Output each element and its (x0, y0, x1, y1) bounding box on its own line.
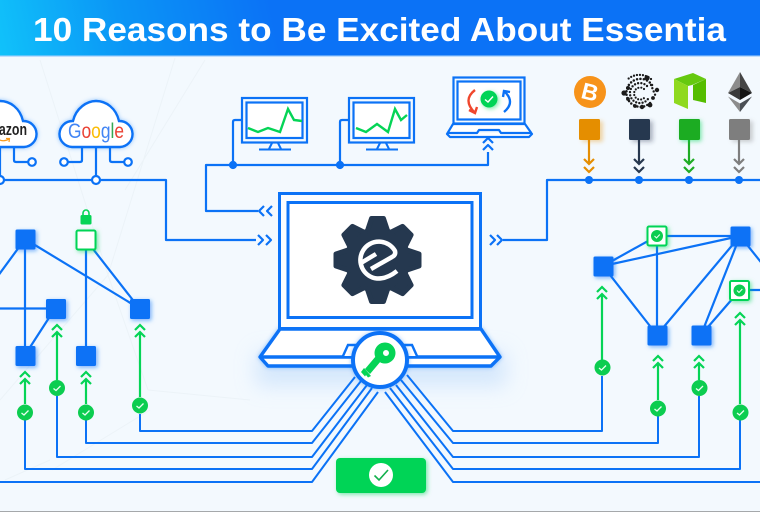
crypto feed: grey square and arrow (729, 119, 750, 184)
key badge (353, 333, 407, 387)
verified node top (648, 226, 666, 246)
blue nodes (594, 226, 750, 346)
left network graph (0, 210, 150, 366)
routing lines from key to nodes (0, 375, 760, 482)
monitor 1 (242, 98, 307, 150)
icon: Essentia gear logo (336, 218, 419, 302)
cloud: Google: Google (68, 120, 124, 143)
cloud: Google (0, 101, 133, 184)
lock (80, 210, 92, 224)
locked node (76, 230, 96, 250)
crypto feed: orange square and arrow (579, 119, 600, 184)
cloud: Amazon (0, 101, 37, 166)
green confirm button (336, 458, 426, 493)
title: 10 Reasons to Be Excited About Essentia (33, 11, 727, 48)
right network graph (594, 226, 760, 346)
crypto feed: green square and arrow (679, 119, 700, 184)
icon: Ethereum (728, 72, 752, 112)
left green arrows and checks (17, 325, 148, 420)
connector lines: top left and monitors (0, 120, 760, 245)
icon: key (361, 342, 396, 378)
right green arrows and checks (594, 287, 748, 420)
icon: Bitcoin (574, 76, 606, 108)
blue nodes (16, 230, 150, 366)
header banner (0, 0, 760, 57)
icon: NEO (674, 73, 706, 109)
small laptop with sync icon (447, 78, 532, 137)
laptop screen (280, 194, 480, 328)
icon: IOTA (621, 75, 659, 109)
monitor 2 (349, 98, 414, 150)
main laptop (260, 194, 500, 366)
icon: Bitcoin: B (579, 77, 601, 107)
crypto feed: navy square and arrow (629, 119, 650, 184)
verified node right (730, 281, 749, 300)
